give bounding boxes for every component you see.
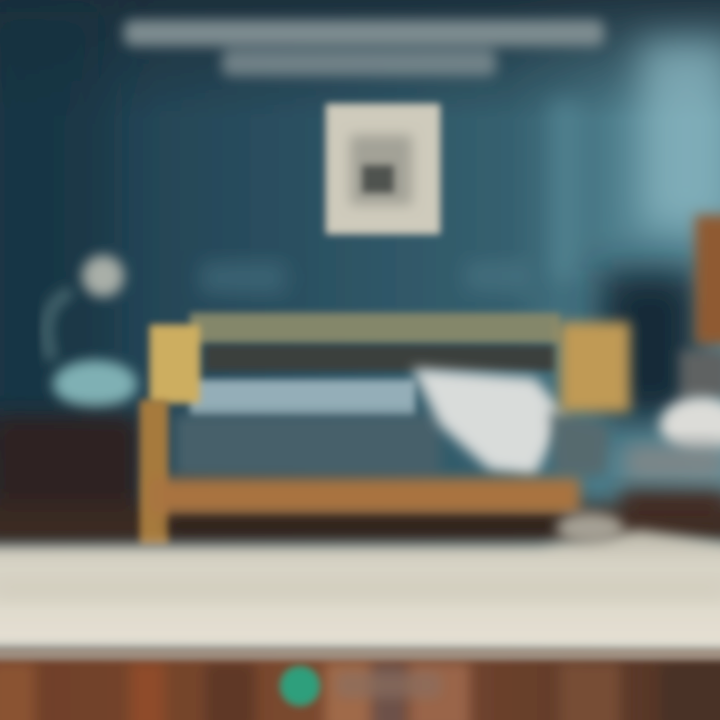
wood floor	[0, 648, 720, 720]
bed	[140, 313, 630, 545]
headboard slats	[205, 345, 555, 371]
nightstand	[0, 415, 140, 530]
second bed at right	[620, 215, 720, 525]
logo wordmark (illegible, shown as soft band)	[336, 672, 441, 698]
logo icon	[280, 666, 320, 706]
lower wall shadow	[0, 505, 720, 545]
blue blanket	[175, 415, 440, 475]
side rail	[150, 478, 580, 514]
framed poster	[326, 104, 440, 234]
rug	[0, 512, 720, 652]
headboard rail	[190, 313, 560, 343]
left post	[150, 325, 200, 403]
mattress	[190, 380, 415, 416]
desk lamp	[47, 255, 137, 408]
right post	[560, 322, 630, 412]
white duvet	[412, 368, 565, 475]
title (illegible, shown as soft bands)	[124, 20, 604, 76]
grey blanket	[550, 410, 610, 475]
